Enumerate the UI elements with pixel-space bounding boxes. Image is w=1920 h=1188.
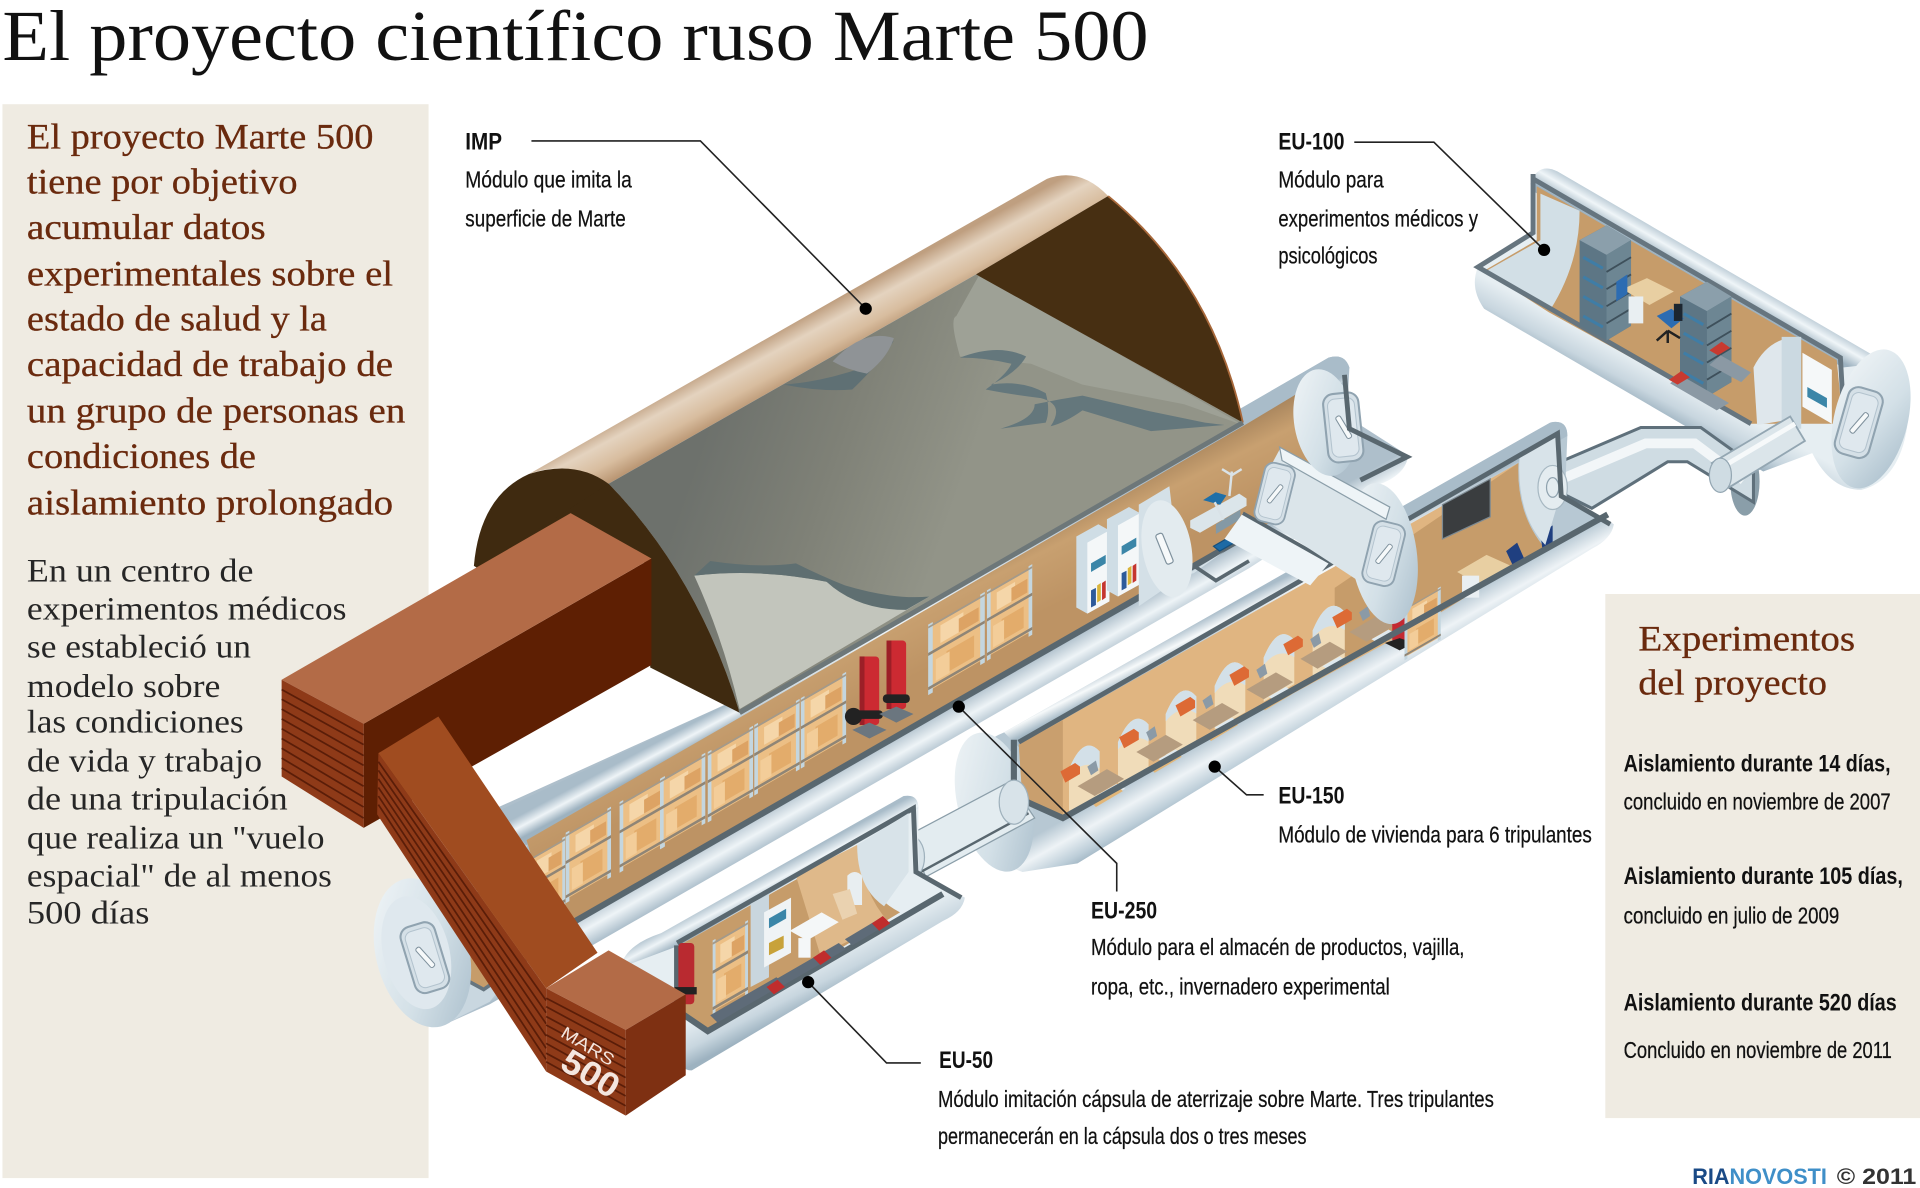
module IMP <box>474 175 1243 713</box>
body text: de una tripulación <box>27 782 288 818</box>
exercise bike <box>1190 469 1247 534</box>
label: EU-250: Módulo para el almacén de productos, vajilla, <box>1091 934 1464 960</box>
credit <box>1692 1164 1916 1188</box>
end wall hatch <box>1519 434 1567 545</box>
server racks <box>1580 225 1631 341</box>
rim <box>576 541 1237 921</box>
red cylinder <box>675 943 697 1004</box>
end disk and door <box>1818 341 1920 497</box>
heading: project objective: aislamiento prolongado <box>27 482 393 522</box>
sign text: MARS <box>558 1022 618 1070</box>
red cylinders <box>845 641 913 738</box>
module EU-150 <box>941 422 1614 880</box>
label: EU-100 <box>1278 129 1550 268</box>
interior bulkhead door <box>1134 486 1249 606</box>
rim <box>1014 514 1608 818</box>
heading: project objective: condiciones de <box>27 436 256 476</box>
heading: project objective: capacidad de trabajo de <box>27 344 393 384</box>
label: EU-100: EU-100 <box>1278 129 1344 156</box>
label: EU-150: Módulo de vivienda para 6 tripulantes <box>1278 822 1592 848</box>
brick structure with Mars 500 sign <box>282 513 686 1116</box>
end block <box>546 950 686 1030</box>
connector pipe EU-150 to EU-100 <box>1555 416 1805 516</box>
sign text: 500 <box>554 1042 626 1106</box>
desk and chair <box>1616 274 1684 343</box>
heading: project objective: experimentales sobre el <box>27 253 393 293</box>
interior surface <box>609 274 1243 713</box>
body text <box>27 554 347 931</box>
label: IMP: Módulo que imita la <box>465 166 632 192</box>
beds <box>1669 342 1751 410</box>
interior <box>677 845 900 1029</box>
panel: project experiments <box>1605 594 1920 1118</box>
interior wall <box>1019 463 1545 818</box>
module EU-50 <box>621 796 965 1070</box>
chairs <box>1506 525 1553 570</box>
front dark face <box>474 468 740 713</box>
panel: project description <box>2 104 429 1178</box>
panel heading: del proyecto <box>1638 662 1827 702</box>
label: EU-150: EU-150 <box>1278 782 1344 809</box>
lower edge <box>740 423 1243 713</box>
heading: project objective <box>27 116 406 522</box>
upper bar <box>364 558 651 828</box>
storage shelves row <box>529 564 1032 928</box>
label: EU-250: EU-250 <box>1091 897 1157 924</box>
left end disk and door <box>359 845 551 1038</box>
connector pipe EU-50 to EU-150 <box>895 780 1035 879</box>
heading: project objective: acumular datos <box>27 207 266 247</box>
body text: se estableció un <box>27 630 252 666</box>
end wall <box>857 813 909 906</box>
interior wall <box>527 382 1335 921</box>
bench <box>1213 528 1251 551</box>
label: EU-150 <box>1209 761 1592 848</box>
back arc <box>976 196 1243 423</box>
desk <box>1457 555 1511 598</box>
panel heading <box>1638 618 1855 702</box>
body text: experimentos médicos <box>27 592 347 628</box>
beds row <box>710 916 890 1023</box>
left disk <box>941 724 1047 880</box>
label: EU-50: permanecerán en la cápsula dos o tres meses <box>938 1123 1307 1149</box>
outer skin <box>529 175 1108 484</box>
experiment: 105 days: concluido en julio de 2009 <box>1624 902 1839 928</box>
inner door and cabinet <box>1753 337 1832 429</box>
experiment: 105 days <box>1624 863 1903 928</box>
experiment: 14 days <box>1624 751 1891 815</box>
label: EU-100: psicológicos <box>1278 242 1378 268</box>
label: EU-250 <box>953 701 1464 999</box>
module EU-100 <box>1475 169 1920 497</box>
sand dune <box>694 573 929 709</box>
label: IMP: superficie de Marte <box>465 206 626 232</box>
label: EU-250: ropa, etc., invernadero experimental <box>1091 973 1390 999</box>
label: EU-50: Módulo imitación cápsula de aterrizaje sobre Marte. Tres tripulantes <box>938 1086 1494 1112</box>
cabinet <box>751 894 791 987</box>
end bulkhead of EU-250 <box>1285 364 1407 481</box>
body text: de vida y trabajo <box>27 744 262 780</box>
crew seats and tables <box>1060 606 1397 807</box>
body text: que realiza un "vuelo <box>27 821 324 857</box>
screen <box>1442 479 1490 539</box>
toilet <box>833 872 862 920</box>
label: EU-100: experimentos médicos y <box>1278 206 1478 232</box>
label: EU-100: Módulo para <box>1278 166 1384 192</box>
sink <box>790 912 839 958</box>
red cylinder <box>1385 594 1414 650</box>
heading: project objective: tiene por objetivo <box>27 162 298 202</box>
body text: En un centro de <box>27 554 253 590</box>
experiment: 520 days <box>1624 989 1897 1063</box>
end wall <box>1487 194 1580 310</box>
body text: modelo sobre <box>27 669 220 705</box>
label: IMP: IMP <box>465 129 502 156</box>
body text: espacial" de al menos <box>27 859 332 895</box>
label: IMP <box>465 129 872 315</box>
windows row <box>1069 598 1345 813</box>
transfer tunnel between EU-250 and EU-150 <box>1224 447 1426 629</box>
body text: las condiciones <box>27 704 244 740</box>
panel heading: Experimentos <box>1638 618 1855 658</box>
heading: project objective: un grupo de personas en <box>27 391 406 431</box>
label: EU-50 <box>802 976 1494 1149</box>
shelf <box>713 920 748 1015</box>
diagonal bar <box>377 753 546 1072</box>
heading: project objective: estado de salud y la <box>27 299 327 339</box>
module EU-250 <box>359 356 1408 1038</box>
body text: 500 días <box>27 895 149 931</box>
label: EU-50: EU-50 <box>939 1047 993 1074</box>
cabinets <box>1076 524 1109 614</box>
heading: project objective: El proyecto Marte 500 <box>27 116 373 156</box>
small shelf <box>1404 587 1441 660</box>
